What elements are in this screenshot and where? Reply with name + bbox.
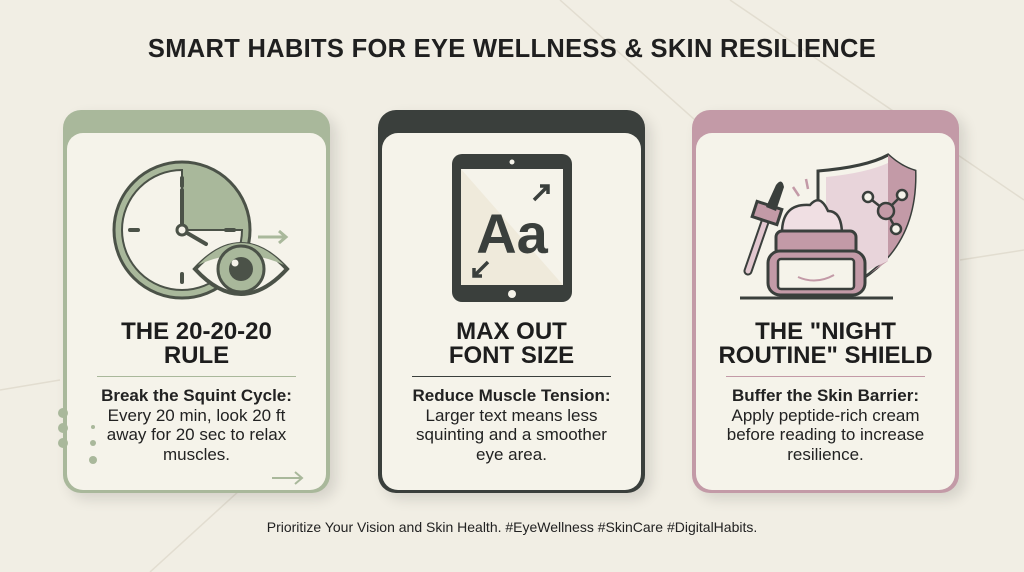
text block xyxy=(101,386,292,464)
text block: Apply peptide-rich cream xyxy=(731,406,920,424)
panel: night routine shield xyxy=(692,110,959,493)
text block: Buffer the Skin Barrier: xyxy=(732,386,919,405)
text block xyxy=(727,386,924,464)
text block: resilience. xyxy=(787,444,864,464)
heading xyxy=(449,318,574,369)
text block: muscles. xyxy=(163,444,230,464)
text block: before reading to increase xyxy=(727,425,924,444)
text block: Every 20 min, look 20 ft xyxy=(108,406,285,424)
panel: max out font size xyxy=(378,110,645,493)
heading xyxy=(718,318,933,369)
icon: dropper, cream jar, shield xyxy=(740,153,917,300)
heading: THE 20-20-20 xyxy=(121,318,272,345)
icon: clock and eye xyxy=(112,160,290,300)
panel: 20-20-20 rule xyxy=(63,110,330,493)
footer: Prioritize Your Vision and Skin Health. #EyeWellness #SkinCare #DigitalHabits. xyxy=(267,519,757,535)
text block: Larger text means less xyxy=(426,406,597,424)
icon: tablet: Aa xyxy=(476,202,549,265)
text block: away for 20 sec to relax xyxy=(107,425,286,444)
text block: Break the Squint Cycle: xyxy=(101,386,292,405)
icon: tablet xyxy=(452,154,572,302)
title: SMART HABITS FOR EYE WELLNESS & SKIN RESILIENCE xyxy=(148,35,876,63)
heading: MAX OUT xyxy=(456,318,567,345)
text block: Reduce Muscle Tension: xyxy=(412,386,611,405)
heading: FONT SIZE xyxy=(449,342,574,369)
text block xyxy=(412,386,611,464)
arrow xyxy=(272,471,304,485)
heading xyxy=(121,318,272,369)
heading: ROUTINE" SHIELD xyxy=(718,342,933,369)
heading: THE "NIGHT xyxy=(755,318,896,345)
text block: squinting and a smoother xyxy=(416,425,607,444)
decorative dots xyxy=(58,408,97,464)
text block: eye area. xyxy=(476,444,547,464)
heading: RULE xyxy=(164,342,229,369)
